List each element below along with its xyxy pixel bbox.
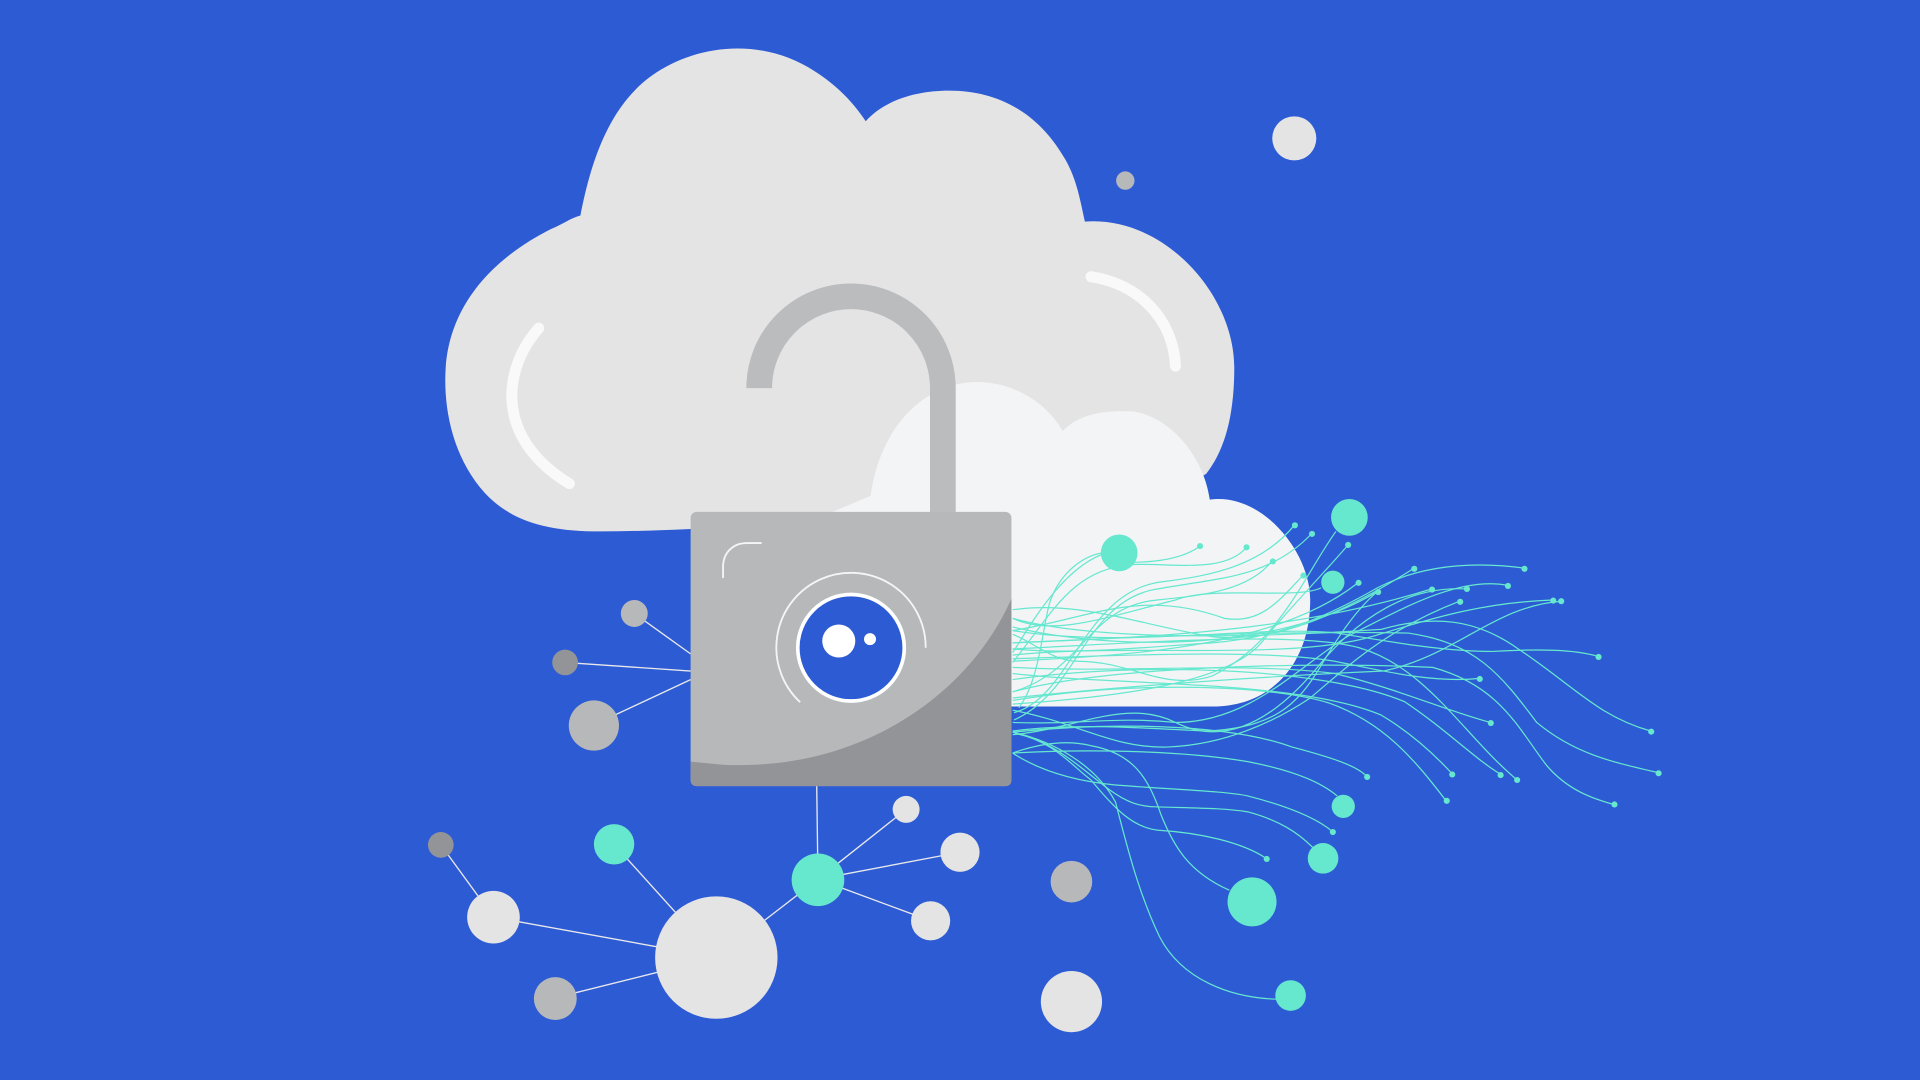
padlock shadow [691,599,1011,786]
floating dots [1041,116,1316,1032]
small front cloud [833,382,1310,707]
teal endpoint dots [1197,522,1662,862]
padlock [691,296,1011,786]
padlock corner glint [723,543,762,578]
teal large dots [1101,499,1368,1011]
large back cloud [445,48,1234,539]
keyhole outer arc [776,573,926,702]
padlock body [691,512,1011,786]
network lines left of padlock [441,613,960,998]
data stream curves [1013,525,1658,999]
padlock shackle [759,296,943,517]
network nodes [428,600,980,1020]
cloud highlight left [512,328,569,484]
keyhole eye [798,594,904,701]
cloud highlight right [1091,277,1176,366]
